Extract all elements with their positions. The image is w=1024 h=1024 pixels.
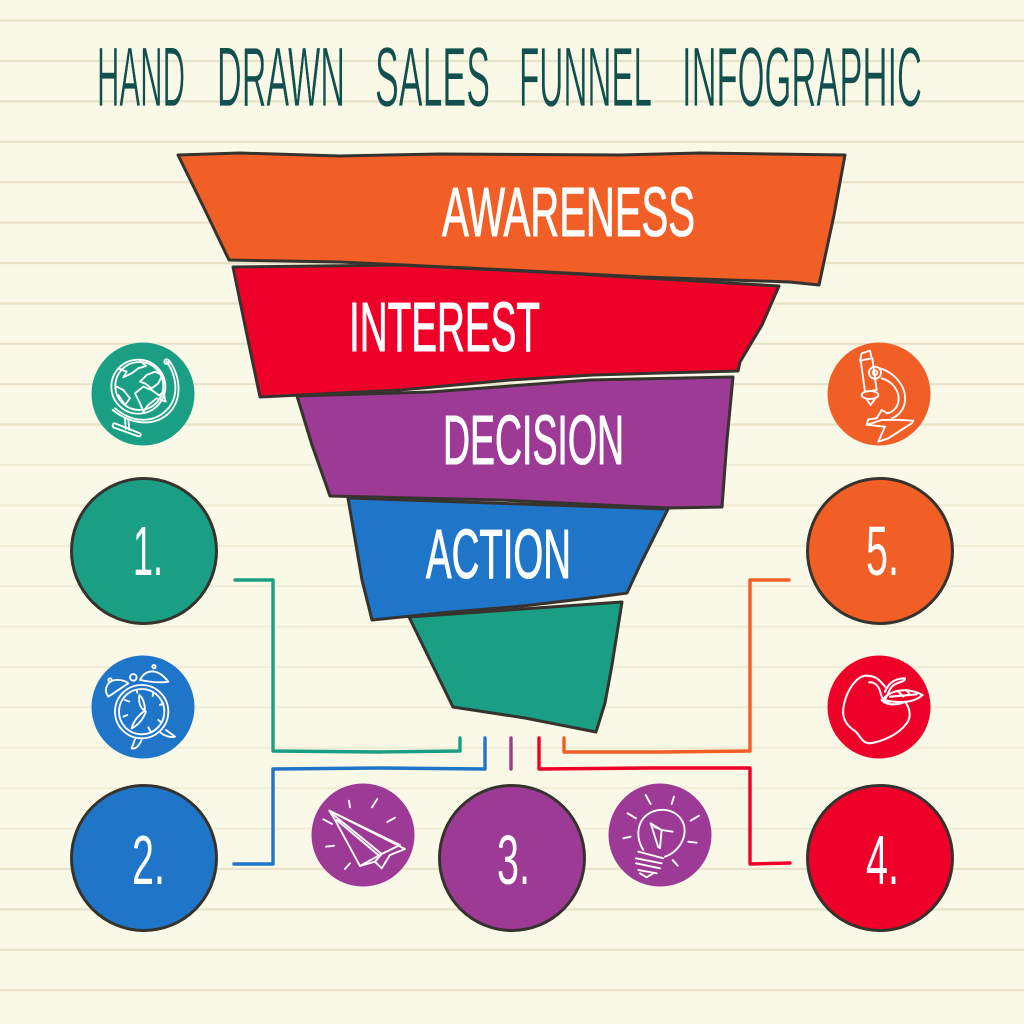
numbered circle 5: 5. — [866, 512, 899, 590]
numbered circle 5 — [808, 478, 952, 624]
numbered circle 2 — [72, 786, 216, 930]
numbered circle 1 — [72, 478, 216, 624]
numbered circle 4 — [808, 786, 952, 930]
funnel — [178, 153, 845, 732]
title: DRAWN — [217, 30, 345, 124]
title: FUNNEL — [519, 30, 652, 124]
icon: apple — [828, 656, 930, 758]
connector: step 4 red — [539, 738, 790, 864]
funnel band: decision — [297, 377, 733, 508]
title — [97, 30, 922, 124]
funnel base: green segment — [409, 602, 622, 732]
funnel band: decision: DECISION — [443, 401, 624, 479]
icon: paper plane — [312, 784, 414, 886]
funnel band: interest: INTEREST — [349, 288, 540, 366]
funnel band: awareness: AWARENESS — [442, 173, 695, 251]
connector: step 5 orange — [564, 580, 789, 752]
funnel band: awareness — [178, 153, 845, 285]
numbered circle 2: 2. — [132, 821, 165, 899]
funnel band: action: ACTION — [426, 515, 571, 593]
icon: alarm clock — [92, 656, 194, 758]
connector: step 2 blue — [234, 738, 485, 864]
icon: microscope — [828, 342, 930, 446]
title: HAND — [97, 30, 185, 124]
icon: light bulb — [608, 784, 712, 886]
icon: globe — [92, 342, 194, 446]
numbered circle 4: 4. — [866, 821, 899, 899]
numbered circle 3 — [440, 786, 584, 930]
connector: step 3 purple — [509, 738, 513, 769]
title: SALES — [375, 30, 490, 124]
numbered circle 3: 3. — [497, 821, 530, 899]
connector: step 1 teal — [235, 580, 460, 752]
funnel band: action — [348, 498, 668, 620]
funnel band: interest — [233, 265, 779, 397]
numbered circle 1: 1. — [133, 512, 163, 590]
